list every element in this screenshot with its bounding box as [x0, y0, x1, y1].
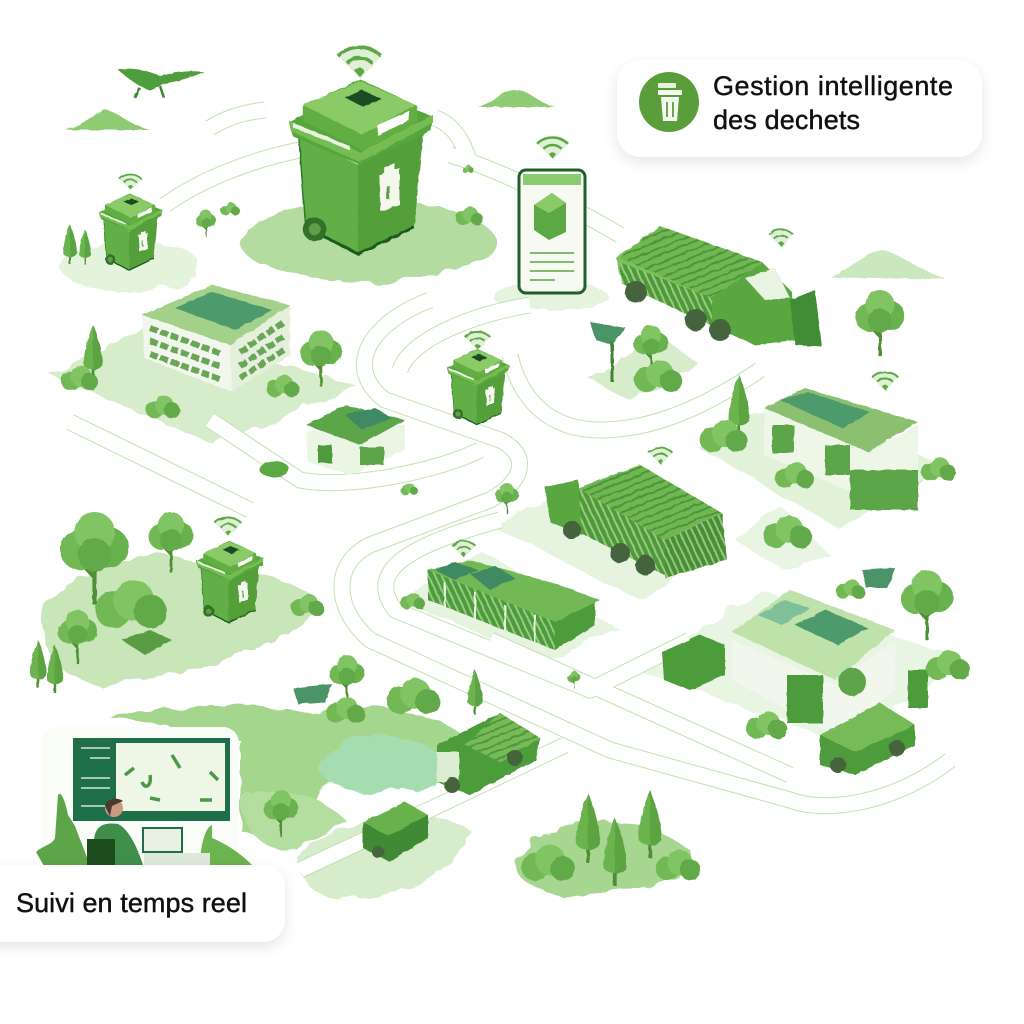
trees right of truck	[855, 290, 905, 356]
park bin body	[196, 541, 264, 623]
depot walls	[428, 570, 595, 650]
forest clump bottom	[521, 790, 701, 886]
card: title: des dechets	[713, 105, 860, 135]
screen	[73, 738, 230, 821]
hill: top centre	[478, 90, 556, 107]
pond truck	[437, 713, 540, 795]
card: title	[617, 60, 982, 157]
icon: wifi over centre truck	[648, 447, 673, 465]
card label: Suivi en temps reel	[16, 888, 247, 918]
right building walls	[764, 408, 918, 500]
phone app	[519, 137, 585, 293]
screen map marks	[125, 755, 218, 800]
left park	[30, 512, 324, 693]
truck wheels	[625, 281, 647, 303]
centre truck cab	[545, 480, 582, 535]
bush beside bin	[456, 207, 483, 225]
centre truck	[545, 447, 727, 578]
desk	[144, 853, 210, 866]
phone header	[523, 174, 581, 185]
icon: wifi over centre bin	[464, 331, 491, 350]
hill: top left	[65, 110, 150, 130]
right building doors	[772, 425, 794, 453]
bottom park trees	[264, 655, 483, 837]
plant side machine	[908, 670, 928, 708]
icon: wifi over park bin	[214, 517, 242, 537]
centre small depot	[306, 405, 405, 475]
building roof	[142, 285, 290, 345]
centre truck wheels	[563, 521, 581, 539]
icon: drone	[118, 69, 204, 98]
bottom right plant	[662, 568, 970, 739]
monitoring panel	[36, 727, 253, 877]
solar lamp	[862, 568, 895, 588]
icon: wifi over small bin	[118, 174, 142, 190]
screen content	[116, 743, 225, 811]
icon: wifi over large bin	[336, 46, 383, 79]
solar lamp and trees patch	[590, 322, 682, 392]
icon: trash can	[639, 72, 699, 132]
icon: wifi over depot	[451, 540, 476, 558]
depot doors	[445, 582, 535, 645]
depot roof	[428, 560, 600, 622]
vegetation	[729, 375, 749, 437]
plant roof	[732, 590, 895, 680]
plant small truck	[662, 635, 725, 690]
left office building	[61, 285, 342, 418]
laptop	[143, 828, 182, 852]
park bench	[122, 630, 172, 655]
recycling depot	[428, 540, 600, 650]
vegetation	[84, 325, 102, 380]
building walls	[142, 315, 232, 392]
solar lamp	[293, 684, 332, 704]
lower small truck	[363, 802, 428, 862]
pines by small bin	[63, 224, 77, 264]
title background	[617, 60, 982, 157]
plant walls	[732, 640, 895, 735]
centre bin body	[447, 349, 509, 425]
roads	[70, 110, 950, 870]
plant right	[200, 825, 253, 866]
top right truck	[616, 226, 822, 347]
bottom right green truck	[820, 703, 915, 775]
phone frame	[519, 170, 585, 293]
bin body	[289, 79, 433, 254]
small trees beside roads	[196, 165, 581, 689]
right building	[700, 371, 956, 510]
plant door	[787, 675, 823, 723]
ground patches	[42, 202, 965, 900]
icon: wifi over right building	[871, 371, 899, 391]
vegetation	[901, 570, 953, 640]
screen sidebar	[81, 748, 110, 806]
centre truck cargo	[578, 465, 722, 540]
building windows	[150, 322, 284, 380]
phone bin image	[534, 193, 566, 240]
right building roof	[764, 388, 918, 452]
small bin body	[99, 193, 162, 270]
plant left	[36, 794, 90, 866]
truck cab	[712, 262, 795, 345]
card background	[0, 865, 285, 942]
centre bin	[447, 331, 509, 425]
truck cargo	[616, 226, 760, 310]
title text: Gestion intelligente	[713, 71, 953, 101]
operator	[87, 799, 143, 866]
phone lines	[530, 253, 574, 280]
icon: wifi over truck	[768, 229, 794, 247]
hill: right	[830, 250, 946, 279]
panel background	[41, 727, 239, 877]
small bin top left	[63, 174, 162, 270]
plant round emblem	[838, 668, 866, 696]
large smart bin	[289, 46, 483, 254]
tree by road	[495, 483, 519, 514]
centre small car	[259, 461, 289, 477]
card: real-time tracking	[0, 865, 285, 942]
icon: wifi over phone	[536, 137, 569, 160]
park trees	[60, 512, 129, 605]
bushes by centre truck	[763, 516, 812, 548]
